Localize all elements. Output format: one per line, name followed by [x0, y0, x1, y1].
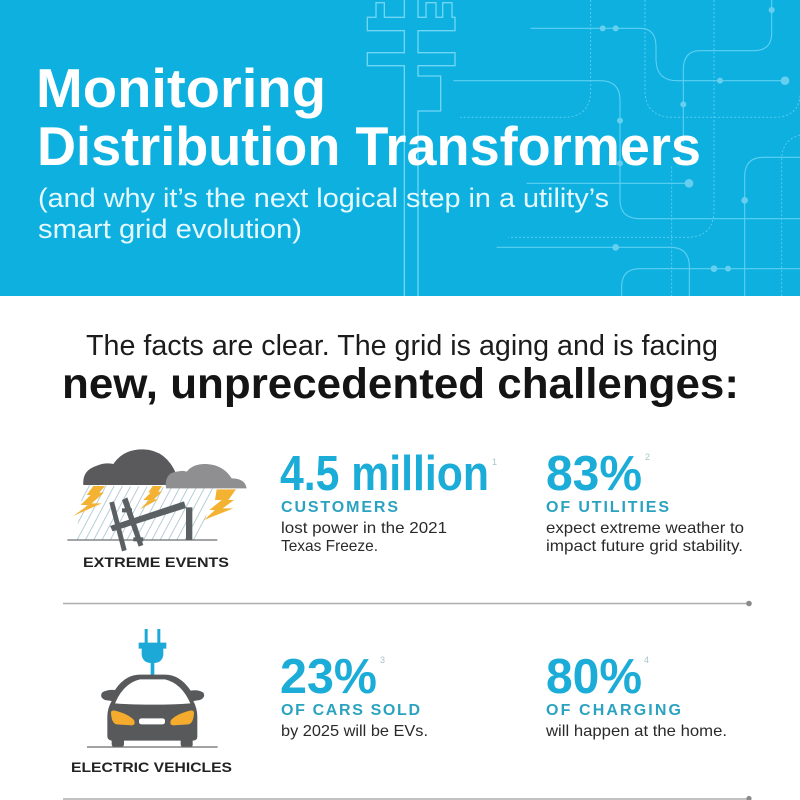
stat: 4.5 million customers: 1 [492, 457, 497, 467]
stat: 80% of charging [545, 650, 727, 740]
stat: 83% of utilities: expect extreme weather to [546, 520, 744, 537]
title: Distribution Transformers [37, 115, 701, 177]
panel: electric vehicles [71, 629, 727, 775]
stat: 83% of utilities: 2 [645, 452, 650, 462]
stat: 83% of utilities: impact future grid stability. [546, 538, 743, 555]
stat: 23% of cars sold [280, 650, 428, 740]
stat: 83% of utilities: 83% [546, 447, 642, 501]
stat: 23% of cars sold: OF CARS SOLD [281, 702, 420, 719]
label: extreme events: EXTREME EVENTS [83, 554, 229, 570]
heading: The facts are clear. The grid is aging and is facing [86, 330, 718, 362]
icon: car with plug [87, 629, 218, 747]
title [36, 57, 701, 177]
banner background [0, 0, 800, 296]
circuit and utility pole line art [367, 0, 800, 296]
title: Monitoring [36, 57, 326, 119]
stat: 80% of charging: OF CHARGING [546, 702, 681, 719]
stat: 4.5 million customers: Texas Freeze. [281, 538, 378, 555]
stat: 23% of cars sold: by 2025 will be EVs. [281, 723, 428, 740]
stat: 80% of charging: 80% [546, 650, 642, 704]
stat: 4.5 million customers: lost power in the 2021 [281, 520, 447, 537]
subtitle: (and why it’s the next logical step in a utility’s [38, 183, 609, 213]
stat: 23% of cars sold: 3 [380, 655, 385, 665]
stat: 4.5 million customers [280, 447, 497, 555]
heading [62, 330, 739, 408]
stat: 23% of cars sold: 23% [280, 650, 377, 704]
icon: storm over fallen utility pole [67, 449, 247, 551]
heading: new, unprecedented challenges: [62, 360, 739, 408]
panel: blue header banner [0, 0, 800, 296]
stat: 4.5 million customers: 4.5 million [280, 447, 489, 501]
stat: 83% of utilities: OF UTILITIES [546, 499, 669, 516]
stat: 80% of charging: will happen at the home. [545, 723, 727, 740]
label: electric vehicles: ELECTRIC VEHICLES [71, 759, 232, 775]
stat: 4.5 million customers: CUSTOMERS [281, 499, 398, 516]
panel: extreme events [67, 447, 744, 570]
subtitle [38, 183, 609, 244]
stat: 83% of utilities [546, 447, 744, 555]
subtitle: smart grid evolution) [38, 214, 302, 244]
stat: 80% of charging: 4 [644, 655, 649, 665]
